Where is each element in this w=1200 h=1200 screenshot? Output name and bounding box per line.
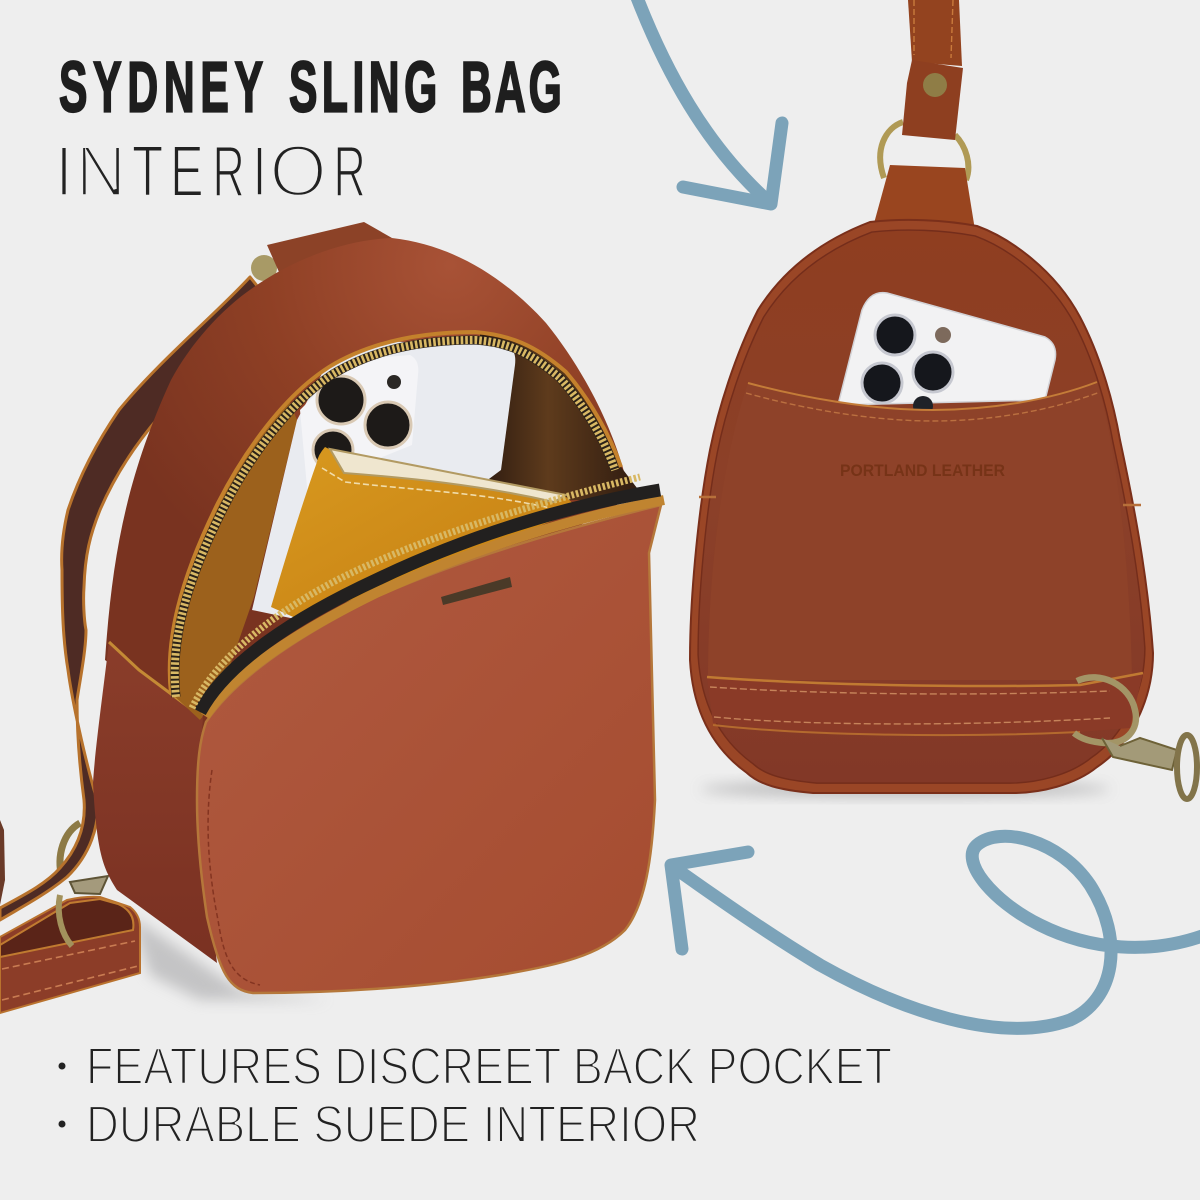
feature bullets [58,1038,892,1154]
interior [160,320,650,720]
o-ring [880,122,968,180]
title line: Interior [54,131,366,212]
long strap [0,277,262,920]
title line: Interior: R [212,131,245,212]
brass ring and clasp [59,823,108,946]
suede lining right [480,334,637,500]
title line: Interior: I [250,132,270,212]
title [54,48,562,212]
side panel [93,642,217,963]
pocket stitching lower row [746,392,1100,421]
title line: Interior: E [170,132,204,212]
upper strap [908,0,962,66]
product: open sling bag [0,222,664,1013]
bag body [690,220,1153,793]
suede edge [205,500,664,716]
side seams [699,497,1141,505]
front panel [197,505,661,993]
title line: Sydney Sling Bag: SLING [289,48,437,127]
arrow: top pointing to back pocket [636,0,782,204]
title line: Interior: R [334,131,366,212]
arrow: looping lower pointing to open bag [671,836,1200,1028]
title line: Interior: N [76,132,126,212]
rivet [923,73,947,97]
feature bullets: DURABLE SUEDE INTERIOR [86,1096,700,1154]
tab [873,165,975,230]
black zipper tape [200,490,660,712]
title line: Interior: I [54,132,74,212]
strap keeper [902,60,963,140]
front panel stitching [208,770,260,985]
amber lining left [176,402,297,720]
embossed logo: PORTLAND LEATHER [840,461,1005,480]
top handle [267,222,392,272]
front zipper teeth [192,477,640,708]
pocket [708,382,1132,680]
side seam [109,642,202,717]
lower strap loop [0,897,140,1013]
rear shell [105,238,640,735]
feature bullets: FEATURES DISCREET BACK POCKET [86,1038,892,1096]
product: back view of sling bag [690,0,1197,799]
far strap fragment [0,820,5,905]
side ring and clasp [1074,677,1197,799]
pocket stitching [748,382,1097,410]
title line: Interior: T [132,131,163,212]
title line: Sydney Sling Bag: SYDNEY [59,48,263,127]
title line: Sydney Sling Bag [59,48,562,127]
lower strap band [707,673,1143,735]
ground shadow [700,782,1110,796]
strap band edges and stitching [707,673,1143,735]
ground shadow [130,915,330,1000]
wallet [271,447,580,620]
title line: Interior: O [269,132,327,212]
inner body [698,230,1145,783]
phone [252,340,515,620]
title line: Sydney Sling Bag: BAG [461,48,562,127]
phone in pocket [838,293,1056,416]
logo tag [441,577,512,605]
lid zipper [170,332,621,697]
brass ring behind handle [251,255,277,281]
